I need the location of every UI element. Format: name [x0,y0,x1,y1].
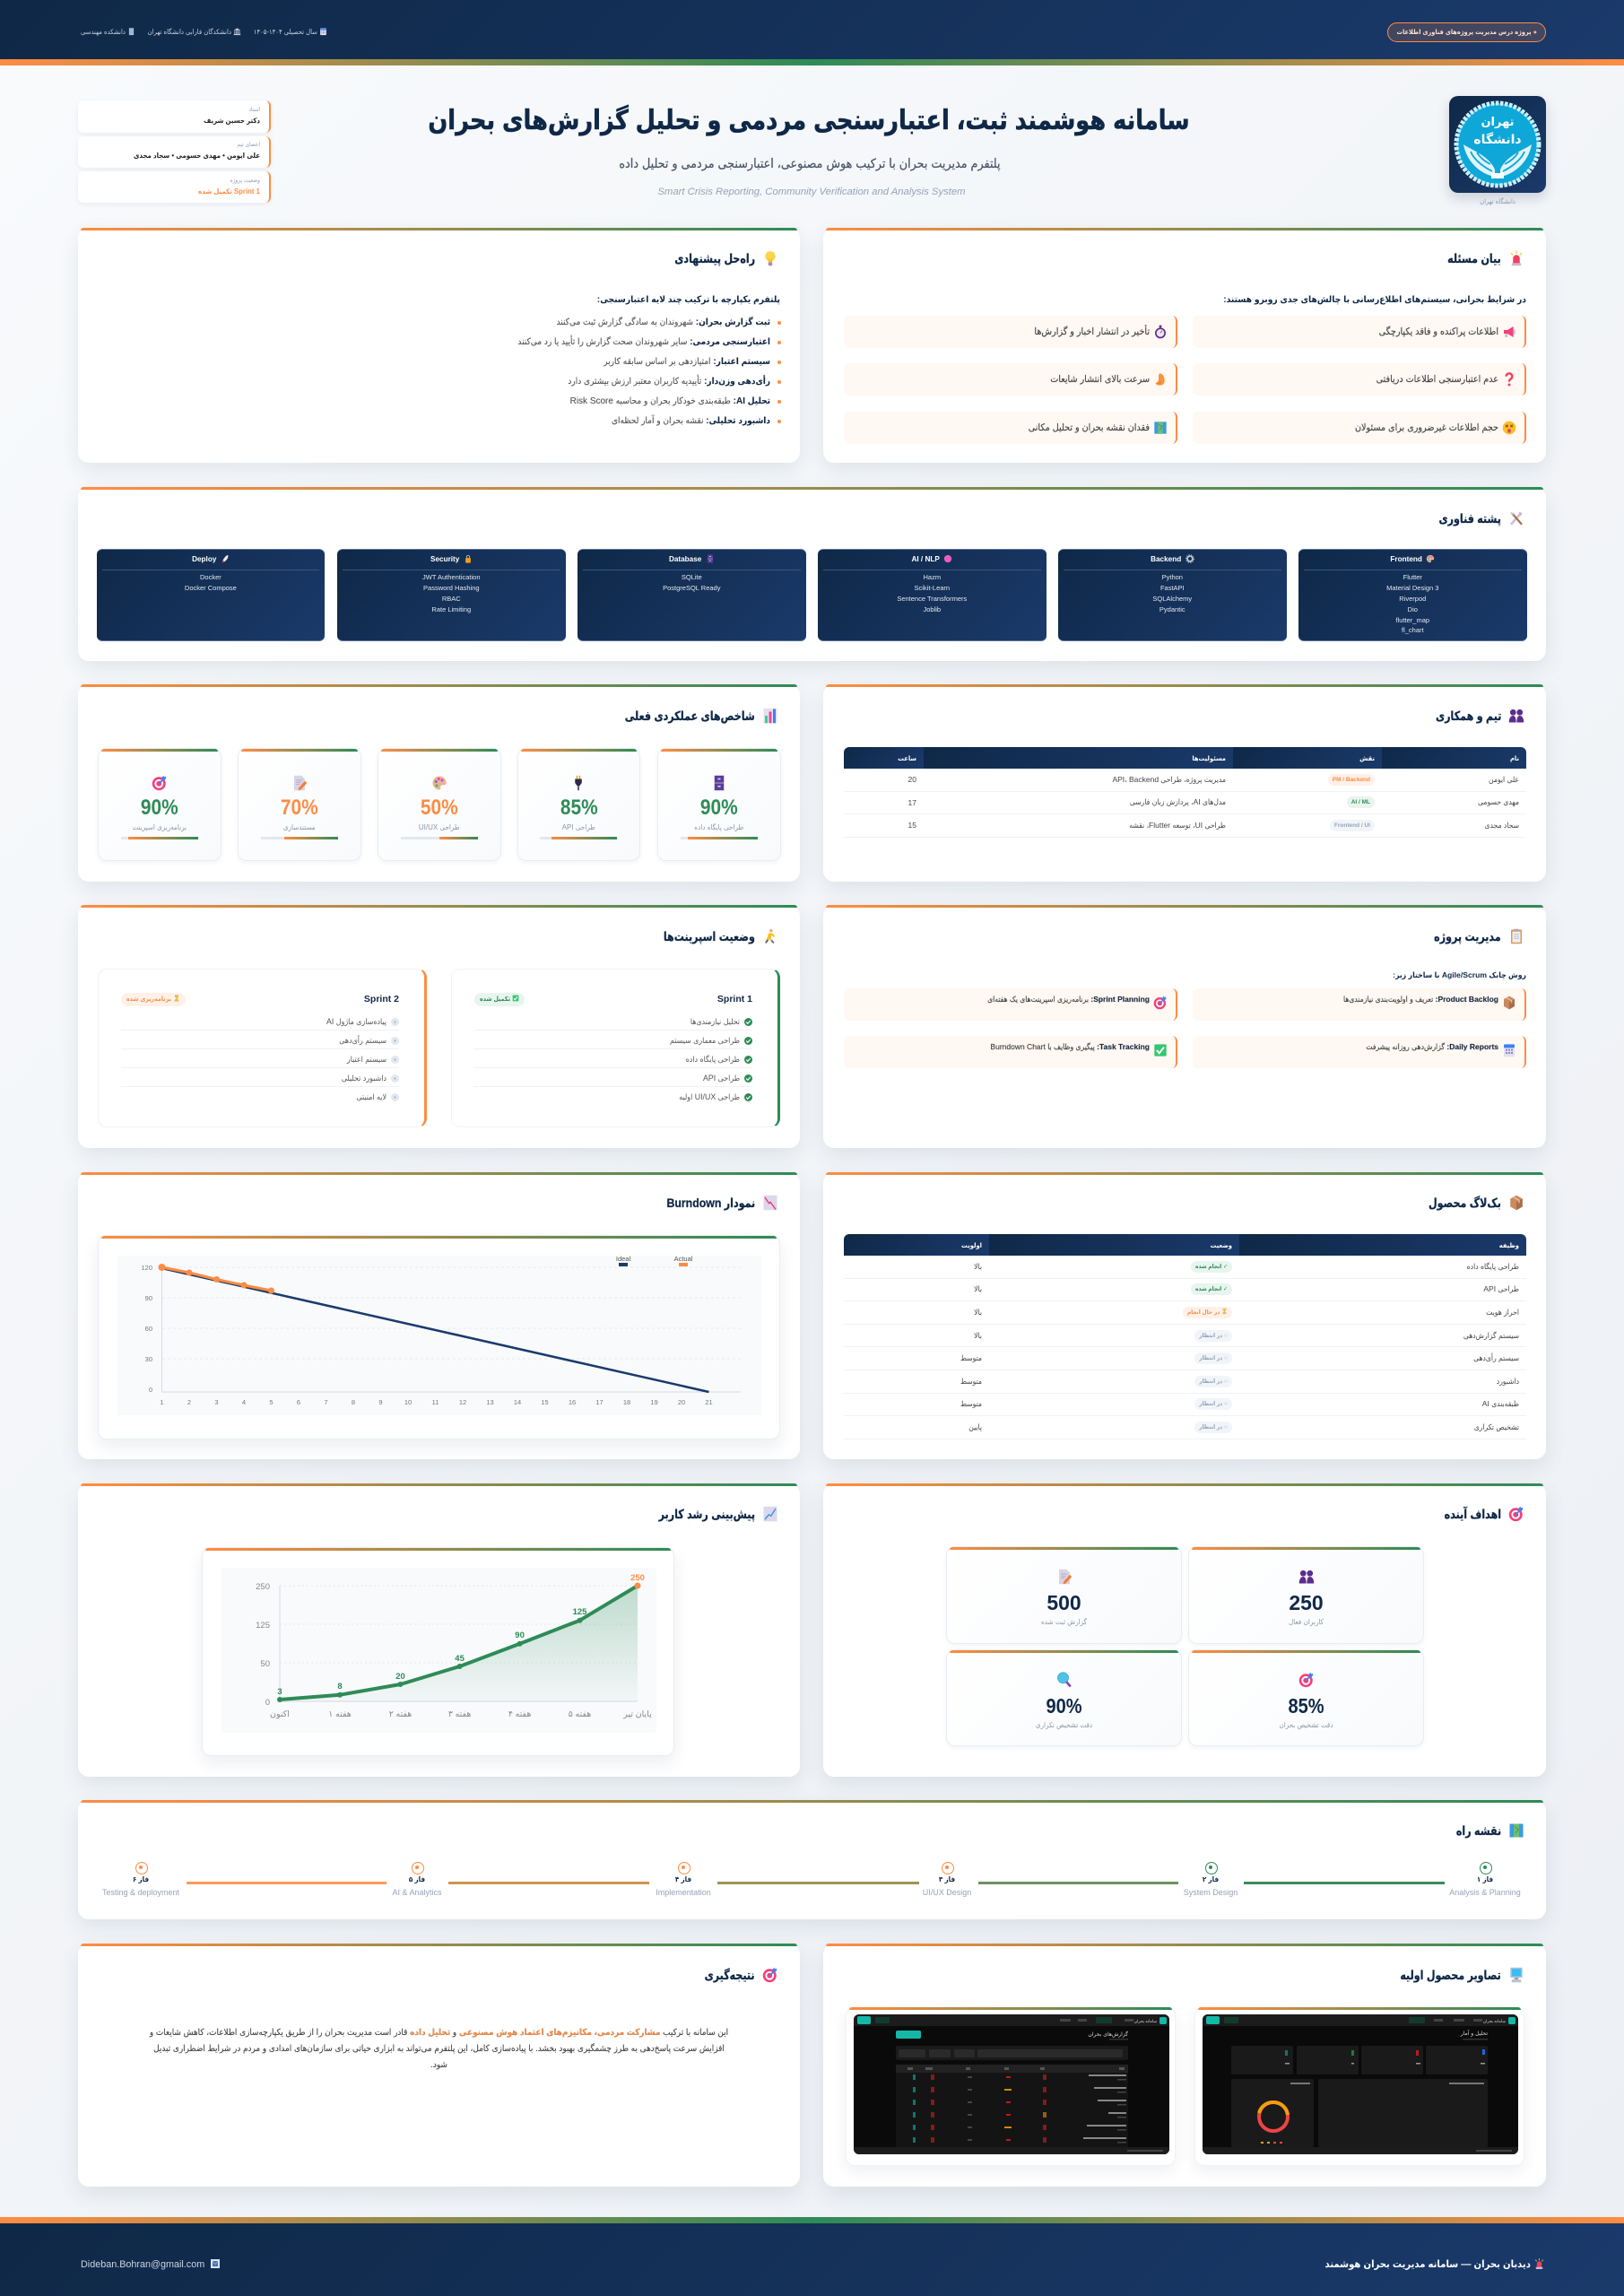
kpi: database design [657,748,780,861]
team table: 17 [908,798,916,807]
item: no crisis map: فقدان نقشه بحران و تحلیل مکانی [1029,422,1150,433]
tech card: security: Password Hashing [423,584,480,592]
burndown line chart: 4 [242,1398,246,1406]
phase 5 [392,1862,442,1897]
panel: performance indicators [78,684,800,882]
kpi: database design: 90% [700,796,738,820]
forecast chart card [202,1547,674,1756]
sprint 1 card: تحلیل نیازمندی‌ها [690,1017,740,1026]
backlog table: تشخیص تکراری [1474,1422,1519,1431]
burndown line chart: 1 [160,1398,164,1406]
user growth area chart [256,1573,652,1719]
item: rumors [844,363,1177,396]
panel: burndown chart [78,1172,800,1459]
heading: team [1436,709,1524,724]
sprint 1 card: طراحی پایگاه داده [686,1055,740,1064]
main title: سامانه هوشمند ثبت، اعتبارسنجی مردمی و تحلیل گزارش‌های بحران [428,106,1190,135]
tech card: frontend: Material Design 3 [1386,584,1438,592]
backlog table: وظیفه [1499,1241,1519,1248]
user growth area chart: 250 [630,1573,645,1583]
academic year: سال تحصیلی ۱۴۰۴-۱۴۰۵ [254,28,317,36]
team table: طراحی UI، توسعه Flutter، نقشه [1129,821,1226,830]
tech card: ai nlp: Hazm [924,573,941,581]
burndown line chart [141,1256,741,1406]
kpi: sprint planning [98,748,221,861]
burndown line chart: 19 [650,1398,658,1406]
backlog table: متوسط [960,1377,982,1386]
item: no verification [1193,363,1526,396]
burndown line chart: 12 [459,1398,466,1406]
heading: conclusion: نتیجه‌گیری [705,1968,755,1982]
burndown line chart: 17 [595,1398,604,1406]
heading: tech stack: پشته فناوری [1439,511,1501,526]
item: product backlog [1193,988,1526,1021]
backlog table: بالا [974,1308,982,1317]
user growth area chart: اکنون [270,1709,290,1719]
backlog table: اولویت [961,1241,982,1248]
backlog table: احراز هویت [1486,1308,1519,1317]
solution bullet list [517,316,781,426]
phase 3: فاز ۳ [939,1875,955,1883]
kpi: api design: 85% [560,796,597,820]
team table: نقش [1359,753,1375,762]
heading: problem [1447,251,1523,265]
panel: technology stack [78,487,1546,661]
burndown line chart: 14 [514,1398,521,1406]
kpi: api design: طراحی API [562,823,595,831]
kpi: ui ux design: طراحی UI/UX [419,823,460,831]
user growth area chart: 45 [455,1654,465,1664]
panel: sprint status [78,905,800,1148]
screenshot card: crisis reports list: سامانه بحران [1134,2020,1157,2024]
panel: product backlog [823,1172,1546,1459]
tech card: frontend: Dio [1408,605,1418,613]
backlog table: متوسط [960,1399,982,1408]
burndown line chart: 0 [149,1386,152,1394]
connector 4 [448,1882,649,1883]
tech card: frontend: Flutter [1403,573,1422,581]
team table: PM / Backend [1333,777,1370,783]
panel: proposed solution [78,228,800,463]
user growth area chart: 90 [515,1631,525,1640]
team table: مدل‌های AI، پردازش زبان فارسی [1130,797,1226,806]
screenshot card: crisis reports list: گزارش‌های بحران [1088,2031,1128,2038]
item: delay [844,316,1177,348]
backlog table: متوسط [960,1353,982,1362]
problem intro: در شرایط بحرانی، سیستم‌های اطلاع‌رسانی با چالش‌های جدی روبرو هستند: [1223,295,1526,305]
solution bullet list: رأی‌دهی وزن‌دار: تأییدیه کاربران معتبر ارزش بیشتری دارد [568,377,770,387]
tech card: ai nlp: Sentence Transformers [897,595,967,603]
tech card: deploy [97,549,325,641]
goal: reports: گزارش ثبت شده [1041,1618,1087,1626]
phase 3 [923,1862,971,1897]
item: fragmented information [1193,316,1526,348]
tech card: database: Database [669,555,701,563]
sprint 2 card: سیستم اعتبار [347,1055,386,1064]
panel: user growth forecast [78,1483,800,1777]
tech card: backend: SQLAlchemy [1152,595,1192,603]
team table: ساعت [898,753,916,762]
tech card: frontend: fl_chart [1402,626,1424,634]
screenshot card: analytics dashboard: سامانه بحران [1483,2020,1506,2024]
screenshot card: crisis reports list [846,2007,1176,2166]
heading: project management [1434,929,1522,944]
team table: 20 [908,775,916,784]
panel: project management [823,905,1546,1148]
phase 4: فاز ۴ [675,1875,691,1883]
sprint 2 card: سیستم رأی‌دهی [339,1036,386,1045]
kpi: database design: طراحی پایگاه داده [694,823,743,831]
item: delay: تأخیر در انتشار اخبار و گزارش‌ها [1034,326,1150,337]
burndown line chart: 10 [404,1398,412,1406]
tech card: ai nlp: AI / NLP [911,555,940,563]
backlog table: ✓ انجام شده [1195,1286,1228,1292]
info card: project status [78,171,271,203]
team table: AI / ML [1351,799,1370,805]
tech card: backend: Backend [1151,555,1181,563]
item: sprint planning [844,988,1177,1021]
item: task tracking [844,1036,1177,1068]
top header bar [0,0,1624,59]
item: rumors: سرعت بالای انتشار شایعات [1050,374,1150,385]
backlog table: سیستم رأی‌دهی [1473,1353,1519,1362]
footer email: Dideban.Bohran@gmail.com [81,2259,204,2270]
course pill badge: ● پروژه درس مدیریت پروژه‌های فناوری اطلاعات [1396,28,1537,36]
goal: duplicate detection accuracy: دقت تشخیص تکراری [1036,1721,1092,1729]
item: no crisis map [844,412,1177,444]
user growth area chart: 50 [260,1659,270,1669]
phase 4: Implementation [656,1888,711,1897]
item: information overload: حجم اطلاعات غیرضروری برای مسئولان [1355,422,1498,433]
burndown line chart: 3 [214,1398,219,1406]
phase 1: فاز ۱ [1477,1875,1493,1883]
tech card: ai nlp: Joblib [923,605,941,613]
tech card: security: JWT Authentication [422,573,481,581]
university logo [1449,96,1546,193]
conclusion paragraph: شود. [430,2060,447,2070]
backlog table: بالا [974,1262,982,1271]
sprint 2 card: لایه امنیتی [356,1092,386,1101]
sprint 1 card [451,969,780,1127]
kpi: documentation: مستندسازی [283,823,316,831]
pm intro: روش چابک Agile/Scrum با ساختار زیر: [1393,970,1526,979]
burndown line chart: 30 [145,1355,152,1363]
info card: team members: علی ایومن • مهدی حسومی • سجاد مجدی [134,152,260,160]
team table [844,747,1526,838]
burndown line chart: 20 [678,1398,685,1406]
burndown line chart: 15 [541,1398,549,1406]
item: no verification: عدم اعتبارسنجی اطلاعات دریافتی [1376,374,1498,385]
connector 1 [1244,1882,1445,1883]
goal: crisis detection accuracy: دقت تشخیص بحران [1279,1721,1333,1729]
tech card: security [337,549,566,641]
burndown line chart: 11 [432,1398,439,1406]
heading: tech stack [1439,511,1523,526]
user growth area chart: هفته ۵ [569,1709,591,1719]
heading: team: تیم و همکاری [1436,709,1501,723]
header gradient strip [0,59,1624,65]
heading: goals: اهداف آینده [1445,1507,1501,1521]
backlog table: ○ در انتظار [1199,1378,1228,1385]
tech card: ai nlp: Scikit-Learn [914,584,950,592]
backlog table: ○ در انتظار [1199,1401,1228,1407]
info card: instructor [78,100,271,133]
goal: duplicate detection accuracy: 90% [1046,1694,1082,1718]
burndown line chart: 120 [141,1264,152,1272]
heading: sprint status: وضعیت اسپرینت‌ها [664,929,755,944]
user growth area chart: 0 [265,1698,270,1708]
phase 1: Analysis & Planning [1449,1888,1521,1897]
info card: instructor: استاد [248,107,260,113]
sprint 1 card: طراحی API [703,1074,740,1083]
user growth area chart: هفته ۱ [328,1709,352,1719]
goal: reports [946,1546,1182,1644]
heading: roadmap: نقشه راه [1456,1822,1501,1837]
backlog table: طبقه‌بندی AI [1482,1399,1519,1408]
backlog table: ✓ انجام شده [1195,1264,1228,1270]
kpi: ui ux design [378,748,500,861]
heading: kpis: شاخص‌های عملکردی فعلی [625,709,755,723]
conclusion paragraph: افزایش سرعت پاسخ‌دهی به طرز چشمگیری بهبود بخشد. با پیاده‌سازی کامل، این پلتفرم می‌تواند به ابزاری حیاتی برای سازمان‌های امدادی و مردم در شرایط اضطراری تبدیل [153,2044,725,2054]
user growth area chart: 250 [256,1582,270,1592]
sprint 2 card [98,969,427,1127]
faculty: دانشکدگان فارابی دانشگاه تهران [148,28,231,36]
tech card: database [578,549,806,641]
kpi: api design [517,748,640,861]
team table: نام [1510,753,1519,762]
burndown line chart: 60 [145,1325,152,1333]
backlog table: در حال انجام [1187,1309,1220,1316]
goal: active users [1188,1546,1424,1644]
backlog table: سیستم گزارش‌دهی [1463,1331,1519,1340]
tech card: backend: FastAPI [1160,584,1185,592]
solution intro: پلتفرم یکپارچه با ترکیب چند لایه اعتبارسنجی: [597,295,780,305]
footer [0,2223,1624,2296]
phase 1 [1449,1862,1521,1897]
heading: screenshots: تصاویر محصول اولیه [1401,1968,1501,1982]
heading: backlog: بک‌لاگ محصول [1429,1195,1501,1209]
logo caption: دانشگاه تهران [1480,197,1515,205]
solution bullet list: ثبت گزارش بحران: شهروندان به سادگی گزارش ثبت می‌کنند [557,317,770,327]
goal: crisis detection accuracy: 85% [1288,1694,1324,1718]
backlog table: داشبورد [1497,1377,1519,1386]
tech card: backend: Pydantic [1159,605,1185,613]
backlog table: بالا [974,1284,982,1293]
kpi: documentation: 70% [281,796,318,820]
item: daily reports [1193,1036,1526,1068]
panel: conclusion [78,1944,800,2187]
kpi: documentation [238,748,360,861]
course pill badge [1387,22,1546,42]
info card: team members: اعضای تیم [237,142,260,148]
burndown line chart: 90 [145,1294,152,1302]
backlog table: ○ در انتظار [1199,1355,1228,1361]
tech card: database: PostgreSQL Ready [663,584,720,592]
goal: crisis detection accuracy [1188,1649,1424,1746]
conclusion paragraph: این سامانه با ترکیب مشارکت مردمی، مکانیزم‌های اعتماد هوش مصنوعی و تحلیل داده قادر است مدیریت بحران را از طریق یکپارچه‌سازی اطلاعات، کاهش شایعات و [150,2028,728,2038]
info card: team members [78,136,271,168]
burndown chart card [98,1235,780,1439]
footer project name: دیدبان بحران — سامانه مدیریت بحران هوشمند [1325,2259,1531,2270]
user growth area chart: هفته ۳ [448,1709,471,1719]
university logo: تهران [1481,116,1515,129]
kpi: sprint planning: برنامه‌ریزی اسپرینت [132,823,187,831]
solution bullet list: سیستم اعتبار: امتیازدهی بر اساس سابقه کاربر [604,357,770,367]
user growth area chart: 3 [277,1687,282,1697]
item: daily reports: Daily Reports: گزارش‌دهی روزانه پیشرفت [1366,1042,1498,1051]
screenshot card: analytics dashboard: تحلیل و آمار [1460,2029,1488,2037]
user growth area chart: 8 [337,1682,343,1692]
sprint 1 card: Sprint 1 [717,994,752,1004]
sprint 2 card: داشبورد تحلیلی [342,1074,386,1083]
phase 4 [656,1862,711,1897]
tech card: backend [1058,549,1287,641]
screenshot card: analytics dashboard [1194,2007,1524,2166]
kpi: sprint planning: 90% [141,796,178,820]
heading: roadmap [1456,1822,1523,1839]
phase 6 [102,1862,179,1897]
item: fragmented information: اطلاعات پراکنده و فاقد یکپارچگی [1379,326,1498,337]
team table: سجاد مجدی [1485,821,1519,830]
burndown line chart: 18 [623,1398,630,1406]
user growth area chart: هفته ۴ [508,1709,531,1719]
tech card: security: Security [430,555,459,563]
phase 6: Testing & deployment [102,1888,179,1897]
connector 5 [187,1882,386,1883]
item: task tracking: Task Tracking: پیگیری وظایف با Burndown Chart [990,1042,1150,1051]
team table: علی ایومن [1489,775,1519,784]
university logo: دانشگاه [1473,132,1522,147]
backlog table: وضعیت [1211,1241,1232,1248]
item: product backlog: Product Backlog: تعریف و اولویت‌بندی نیازمندی‌ها [1343,995,1498,1004]
solution bullet list: اعتبارسنجی مردمی: سایر شهروندان صحت گزارش را تأیید یا رد می‌کنند [517,337,770,347]
team table: 15 [908,821,916,830]
tech card: deploy: Docker Compose [185,584,237,592]
goal: active users: 250 [1289,1591,1324,1614]
heading: project management: مدیریت پروژه [1434,929,1501,944]
panel: team and collaboration [823,684,1546,882]
user growth area chart: 125 [573,1607,587,1617]
burndown line chart: 21 [705,1398,713,1406]
phase 6: فاز ۶ [133,1875,149,1883]
goal: duplicate detection accuracy [946,1649,1182,1746]
subtitle: پلتفرم مدیریت بحران با ترکیب هوش مصنوعی، اعتبارسنجی مردمی و تحلیل داده [619,157,1001,171]
phase 2 [1184,1862,1238,1897]
burndown line chart: 16 [569,1398,576,1406]
solution bullet list: تحلیل AI: طبقه‌بندی خودکار بحران و محاسبه Risk Score [570,396,770,406]
burndown line chart: 7 [324,1398,328,1406]
burndown line chart: 5 [269,1398,274,1406]
tech card: security: RBAC [442,595,461,603]
tech card: frontend [1298,549,1527,641]
tech card: deploy: Deploy [192,555,216,563]
burndown line chart: 6 [297,1398,300,1406]
phase 5: AI & Analytics [392,1888,442,1897]
user growth area chart: پایان تیر [622,1709,652,1719]
panel: future goals [823,1483,1546,1777]
panel: product screenshots [823,1944,1546,2187]
heading: conclusion [705,1968,777,1983]
backlog table: ○ در انتظار [1199,1333,1228,1339]
goal: active users: کاربران فعال [1289,1618,1324,1626]
phase 3: UI/UX Design [923,1888,971,1897]
english subtitle: Smart Crisis Reporting, Community Verification and Analysis System [657,187,966,197]
info card: instructor: دکتر حسین شریف [204,117,260,125]
tech card: frontend: Frontend [1390,555,1422,563]
backlog table: ○ در انتظار [1199,1424,1228,1431]
tech card: frontend: flutter_map [1396,616,1429,624]
goal: reports: 500 [1046,1591,1081,1614]
tech card: ai nlp [818,549,1046,641]
sprint 2 card: برنامه‌ریزی شده [126,996,171,1003]
panel: roadmap [78,1800,1546,1919]
tech card: security: Rate Limiting [431,605,471,613]
phase 5: فاز ۵ [409,1875,425,1883]
backlog table: طراحی پایگاه داده [1467,1262,1519,1271]
burndown line chart: 13 [486,1398,494,1406]
tech card: database: SQLite [682,573,702,581]
backlog table: بالا [974,1331,982,1340]
team table: مدیریت پروژه، طراحی API، Backend [1112,775,1226,784]
department: دانشکده مهندسی [81,28,126,36]
info card: project status: وضعیت پروژه [230,178,260,184]
item: sprint planning: Sprint Planning: برنامه‌ریزی اسپرینت‌های یک هفته‌ای [987,995,1150,1004]
burndown line chart: 9 [378,1398,383,1406]
user growth area chart: هفته ۲ [389,1709,412,1719]
heading: burndown: نمودار Burndown [666,1195,755,1209]
panel: problem statement [823,228,1546,463]
burndown line chart: 8 [352,1398,355,1406]
connector 2 [978,1882,1178,1883]
heading: forecast: پیش‌بینی رشد کاربر [659,1507,755,1521]
backlog table: پایین [968,1422,982,1431]
item: information overload [1193,412,1526,444]
team table: مهدی حسومی [1478,797,1519,806]
backlog table [844,1234,1526,1439]
sprint 1 card: تکمیل شده [480,996,510,1003]
phase 2: فاز ۲ [1203,1875,1219,1883]
heading: solution: راه‌حل پیشنهادی [674,251,755,265]
team table: Frontend / UI [1334,822,1370,829]
connector 3 [717,1882,919,1883]
solution bullet list: داشبورد تحلیلی: نقشه بحران و آمار لحظه‌ای [612,416,770,426]
team table: مسئولیت‌ها [1192,753,1226,762]
user growth area chart: 125 [256,1621,270,1631]
user growth area chart: 20 [395,1672,405,1682]
sprint 1 card: طراحی UI/UX اولیه [679,1092,740,1101]
backlog table: طراحی API [1483,1284,1519,1293]
phase 2: System Design [1184,1888,1238,1897]
conclusion paragraph [149,2028,728,2070]
kpi: ui ux design: 50% [421,796,458,820]
sprint 1 card: طراحی معماری سیستم [670,1036,740,1045]
heading: problem: بیان مسئله [1447,251,1501,265]
burndown line chart: 2 [187,1398,191,1406]
footer gradient strip [0,2217,1624,2223]
tech card: deploy: Docker [200,573,221,581]
tech card: backend: Python [1162,573,1183,581]
tech card: frontend: Riverpod [1399,595,1426,603]
sprint 2 card: Sprint 2 [364,994,399,1004]
info card: project status: Sprint 1 تکمیل شده [198,187,260,196]
heading: goals [1445,1506,1523,1521]
sprint 2 card: پیاده‌سازی ماژول AI [326,1017,386,1026]
